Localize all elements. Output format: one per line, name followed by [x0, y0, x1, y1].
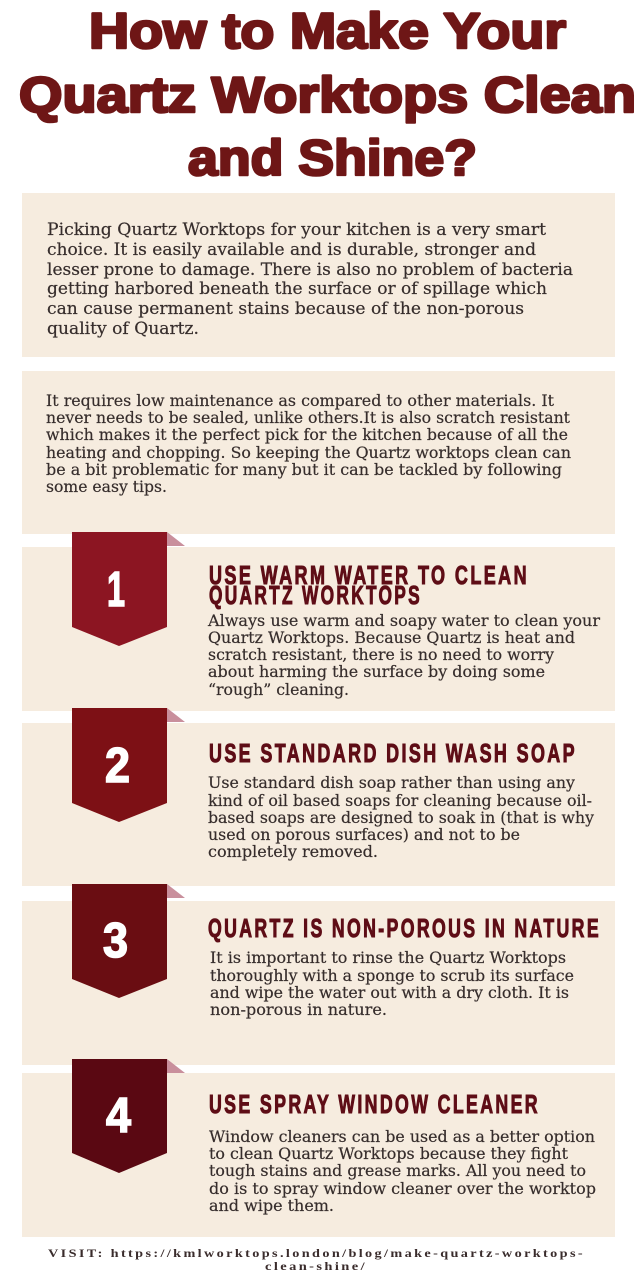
text: intro one: [47, 220, 573, 339]
footer link: [48, 1246, 585, 1273]
title: Quartz Worktops Clean: [19, 67, 636, 123]
ribbon: tip 4: 4: [106, 1089, 131, 1143]
text: intro two: [46, 392, 571, 496]
panel: tip 4: [22, 1059, 615, 1237]
text: tip 1 body: about harming the surface by doing some: [208, 663, 545, 681]
panel: tip 3: [22, 884, 615, 1065]
text: tip 3 body: It is important to rinse the Quartz Worktops: [210, 949, 566, 967]
text: tip 2 body: [208, 774, 594, 861]
heading: tip 1: QUARTZ WORKTOPS: [209, 582, 422, 610]
footer link: VISIT: https://kmlworktops.london/blog/make-quartz-worktops-: [48, 1246, 585, 1260]
text: intro one: Picking Quartz Worktops for your kitchen is a very smart: [47, 220, 546, 240]
title: How to Make Your: [89, 3, 566, 59]
text: intro two: heating and chopping. So keeping the Quartz worktops clean can: [46, 444, 571, 462]
footer link: clean-shine/: [265, 1259, 367, 1273]
ribbon: tip 3: 3: [103, 914, 128, 968]
panel: intro paragraph one: [22, 193, 615, 357]
ribbon: tip 1: 1: [107, 563, 125, 617]
heading: tip 1: [209, 562, 529, 610]
ribbon: tip 2: [72, 708, 185, 822]
text: tip 2 body: kind of oil based soaps for cleaning because oil-: [208, 792, 592, 810]
text: tip 1 body: [207, 612, 601, 699]
text: tip 2 body: Use standard dish soap rather than using any: [208, 774, 575, 792]
text: intro two: It requires low maintenance as compared to other materials. It: [46, 392, 555, 410]
text: tip 2 body: based soaps are designed to soak in (that is why: [208, 809, 594, 827]
ribbon: tip 2: 2: [105, 739, 130, 793]
text: tip 3 body: thoroughly with a sponge to scrub its surface: [210, 967, 574, 985]
text: tip 2 body: used on porous surfaces) and not to be: [208, 826, 520, 844]
text: tip 2 body: completely removed.: [208, 843, 378, 861]
text: intro two: which makes it the perfect pick for the kitchen because of all the: [46, 426, 568, 444]
text: intro two: never needs to be sealed, unlike others.It is also scratch resistant: [46, 409, 571, 427]
text: tip 1 body: scratch resistant, there is no need to worry: [208, 646, 554, 664]
text: tip 1 body: Quartz Worktops. Because Quartz is heat and: [208, 629, 575, 647]
text: intro one: can cause permanent stains because of the non-porous: [47, 299, 524, 319]
text: intro one: lesser prone to damage. There is also no problem of bacteria: [47, 260, 573, 280]
title: [19, 3, 636, 186]
text: tip 4 body: do is to spray window cleaner over the worktop: [209, 1180, 596, 1198]
text: tip 4 body: to clean Quartz Worktops because they fight: [209, 1145, 569, 1163]
text: tip 4 body: Window cleaners can be used as a better option: [209, 1128, 595, 1146]
panel: tip 2: [22, 708, 615, 886]
ribbon: tip 3: [72, 884, 185, 998]
text: tip 4 body: and wipe them.: [209, 1197, 334, 1215]
text: tip 3 body: and wipe the water out with a dry cloth. It is: [210, 984, 569, 1002]
panel: intro paragraph two: [22, 371, 615, 534]
text: tip 4 body: tough stains and grease marks. All you need to: [209, 1162, 586, 1180]
text: intro one: choice. It is easily available and is durable, stronger and: [47, 240, 536, 260]
text: intro two: be a bit problematic for many but it can be tackled by following: [46, 461, 562, 479]
text: intro one: getting harbored beneath the surface or of spillage which: [47, 279, 547, 299]
text: intro two: some easy tips.: [46, 478, 167, 496]
ribbon: tip 4: [72, 1059, 185, 1173]
text: tip 1 body: “rough” cleaning.: [208, 681, 349, 699]
text: tip 3 body: [210, 949, 574, 1019]
text: intro one: quality of Quartz.: [47, 319, 199, 339]
text: tip 1 body: Always use warm and soapy water to clean your: [207, 612, 601, 630]
title: and Shine?: [188, 130, 477, 186]
text: tip 4 body: [209, 1128, 596, 1215]
ribbon: tip 1: [72, 532, 185, 646]
panel: tip 1: [22, 532, 615, 711]
text: tip 3 body: non-porous in nature.: [210, 1001, 387, 1019]
